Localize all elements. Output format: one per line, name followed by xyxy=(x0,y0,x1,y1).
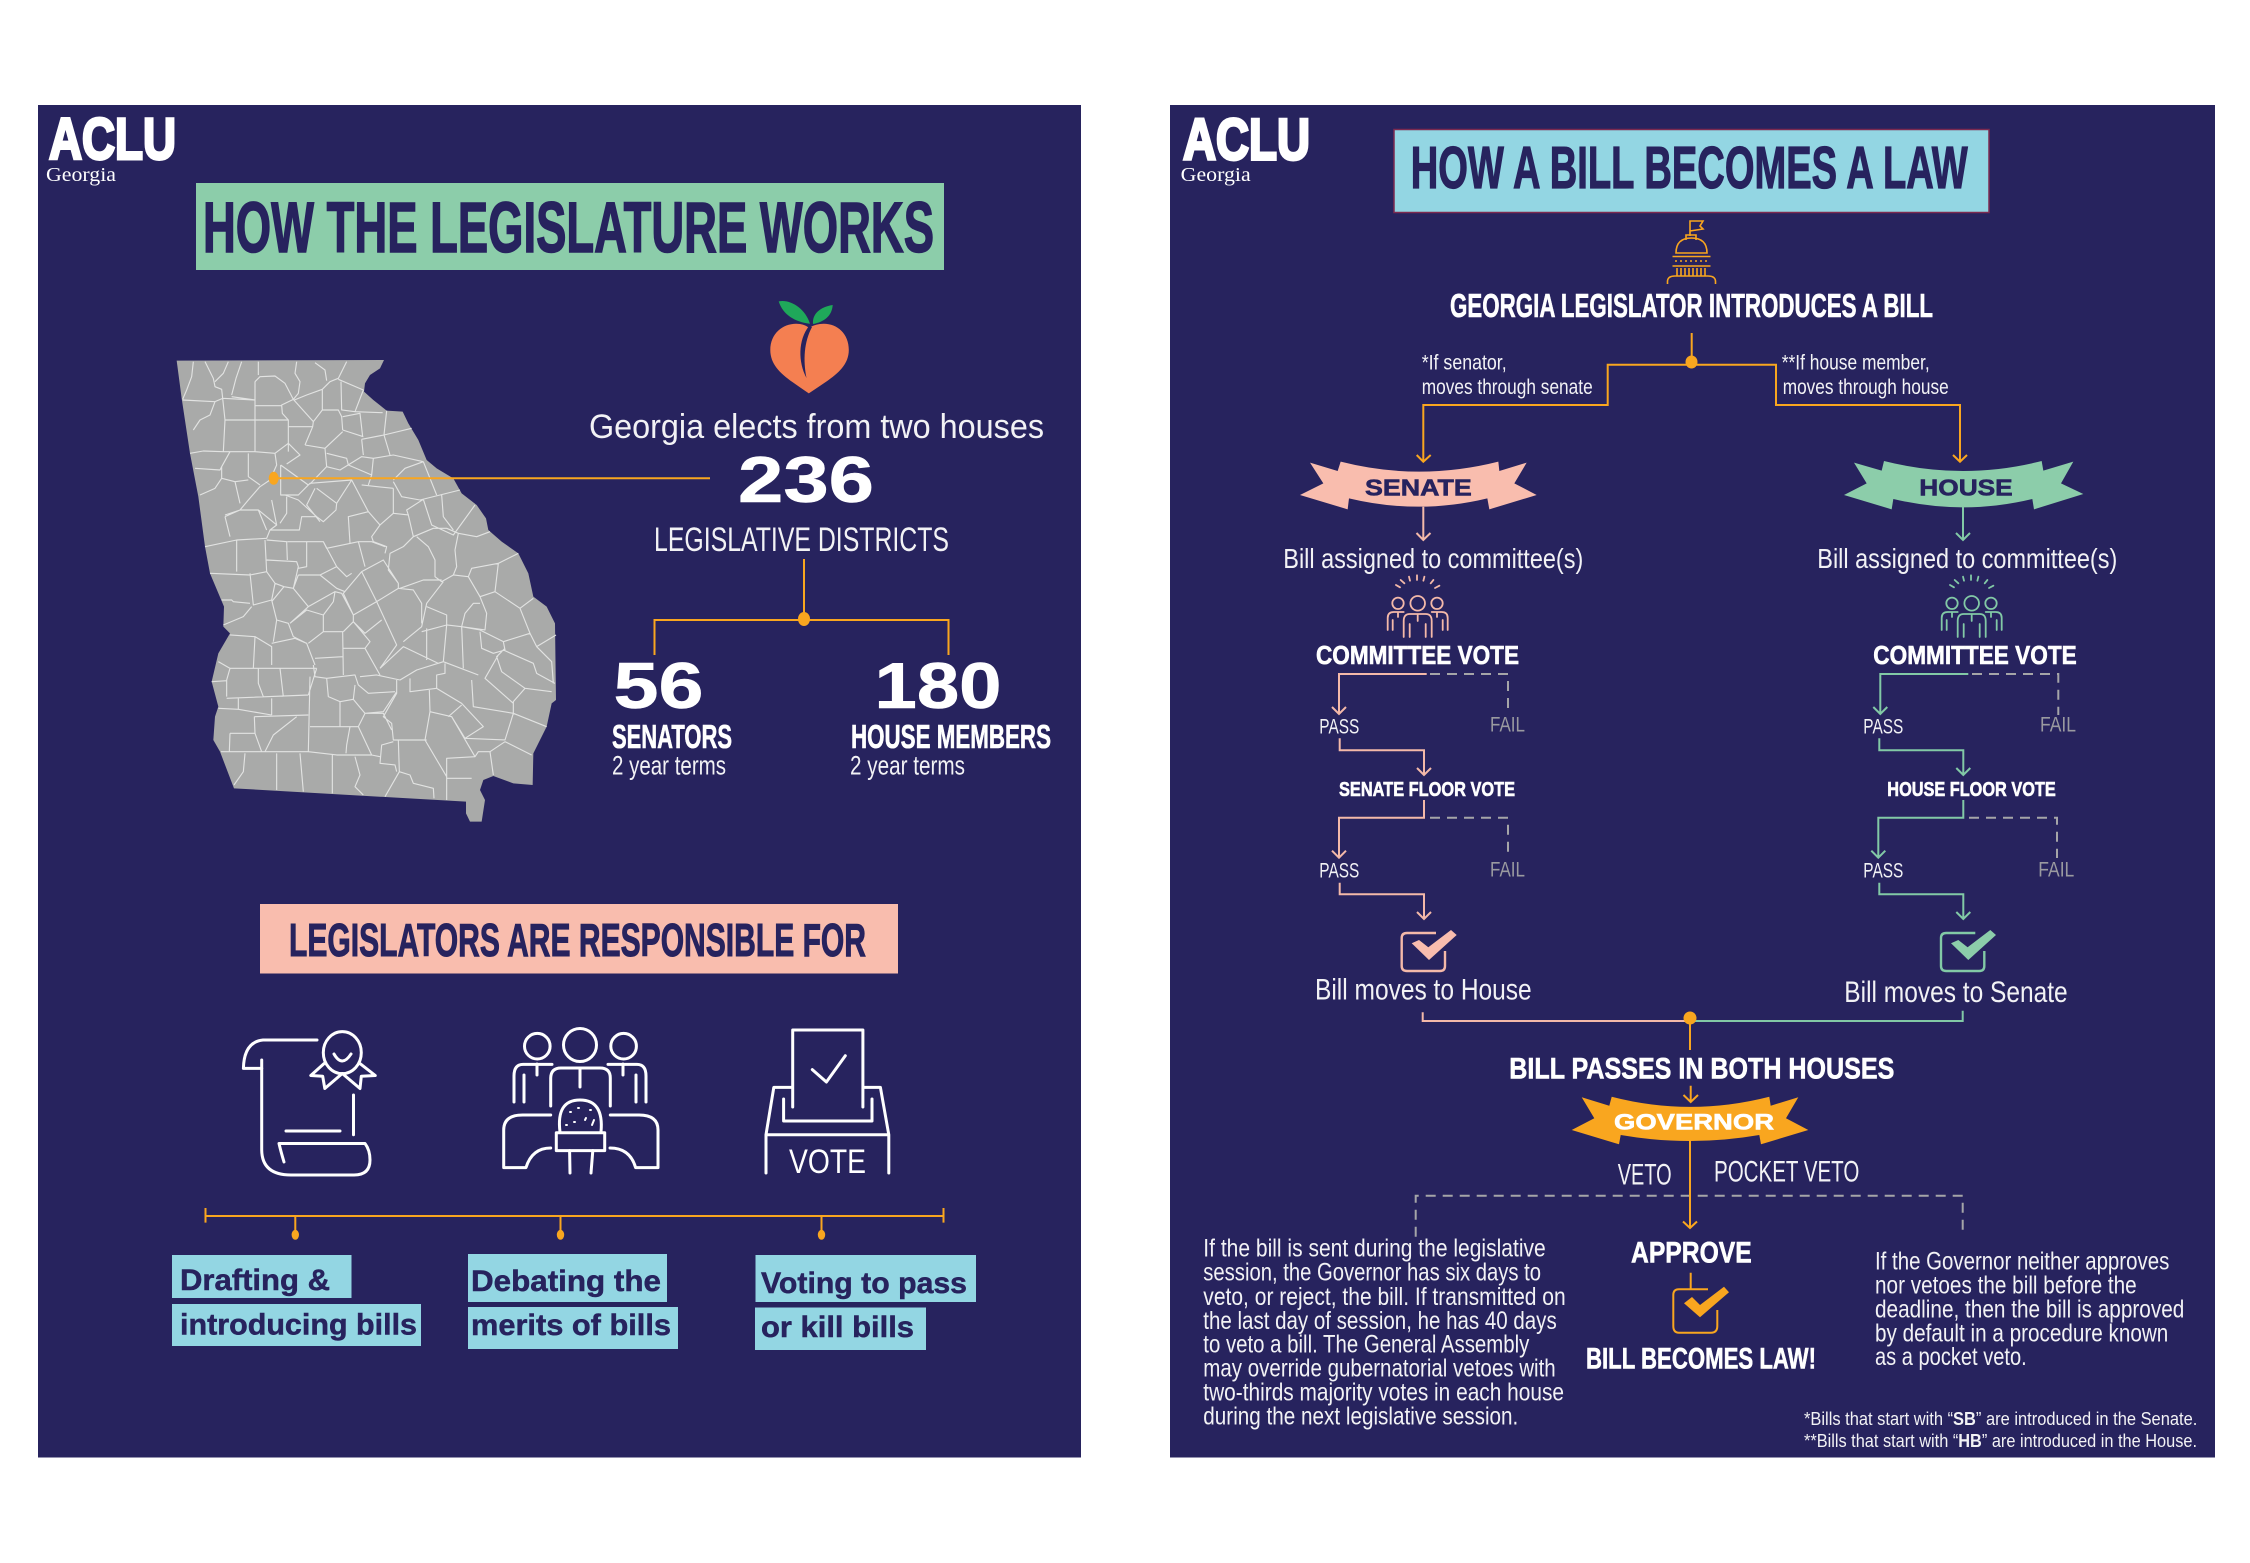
stat: 56 senators xyxy=(612,649,732,780)
icon: senate checkbox xyxy=(1402,930,1457,971)
text block: veto explanation xyxy=(1203,1235,1566,1430)
logo: ACLU Georgia: ACLU xyxy=(1183,108,1310,172)
stat: 180 house members xyxy=(850,649,1051,780)
text: bill moves to senate: Bill moves to Senate xyxy=(1844,976,2068,1009)
icon: debating legislators xyxy=(504,1028,658,1173)
logo: ACLU Georgia xyxy=(1181,108,1310,186)
title: how the legislature works xyxy=(196,183,944,270)
banner: senate: SENATE xyxy=(1365,475,1472,501)
flow: senate floor pass and fail: FAIL xyxy=(1490,859,1525,882)
flow: committee pass and fail: PASS xyxy=(1319,715,1359,738)
text block: pocket veto explanation: as a pocket veto. xyxy=(1875,1343,2027,1371)
icon: scroll with seal xyxy=(243,1032,375,1175)
text: committee vote: COMMITTEE VOTE xyxy=(1873,642,2077,670)
text block: veto explanation: may override gubernatorial vetoes with xyxy=(1203,1355,1556,1383)
flow: committee pass and fail xyxy=(1863,674,2076,775)
panel: how the legislature works xyxy=(38,105,1081,1458)
label: drafting and introducing bills xyxy=(172,1255,421,1346)
connector: split to senate and house xyxy=(1417,333,1967,462)
text: Georgia elects from two houses: Georgia elects from two houses xyxy=(589,408,1044,446)
banner: house xyxy=(1844,461,2083,509)
flow: senate floor pass and fail xyxy=(1319,800,1525,919)
arrow: senate to committee xyxy=(1416,507,1430,540)
panel: how a bill becomes a law xyxy=(1170,105,2215,1458)
text: bill becomes law: BILL BECOMES LAW! xyxy=(1586,1342,1816,1375)
flow: house floor pass and fail: FAIL xyxy=(2038,859,2074,882)
text block: pocket veto explanation: deadline, then the bill is approved xyxy=(1875,1295,2184,1323)
text block: veto explanation: If the bill is sent during the legislative xyxy=(1203,1235,1546,1263)
icon: ballot box: VOTE xyxy=(789,1143,866,1181)
text: senate floor vote: SENATE FLOOR VOTE xyxy=(1339,779,1515,801)
label: voting to pass or kill bills xyxy=(755,1255,976,1350)
logo: ACLU Georgia xyxy=(46,107,176,186)
icon: peach xyxy=(770,301,849,393)
heading: bill passes in both houses: BILL PASSES IN BOTH HOUSES xyxy=(1509,1053,1894,1086)
text: committee vote: COMMITTEE VOTE xyxy=(1316,642,1519,670)
text: approve: APPROVE xyxy=(1631,1237,1752,1270)
stat: 180 house members: HOUSE MEMBERS xyxy=(851,718,1051,755)
stat: 236: 236 xyxy=(738,443,874,516)
text block: veto explanation: session, the Governor has six days to xyxy=(1203,1259,1541,1287)
stat: 56 senators: 56 xyxy=(614,649,704,722)
banner: house: HOUSE xyxy=(1919,475,2013,501)
text: house floor vote: HOUSE FLOOR VOTE xyxy=(1887,779,2056,801)
logo: ACLU Georgia: ACLU xyxy=(49,107,176,172)
flow: committee pass and fail: FAIL xyxy=(2040,714,2076,737)
icon: senate committee xyxy=(1388,575,1448,637)
text: bill assigned to committee: Bill assigned to committee(s) xyxy=(1817,543,2117,574)
flow: house floor pass and fail: PASS xyxy=(1863,860,1903,883)
banner: senate xyxy=(1300,462,1537,509)
title: how the legislature works: HOW THE LEGISLATURE WORKS xyxy=(203,189,934,268)
text block: pocket veto explanation: If the Governor neither approves xyxy=(1875,1247,2169,1275)
banner: governor xyxy=(1572,1097,1808,1144)
text block: pocket veto explanation: by default in a procedure known xyxy=(1875,1319,2168,1347)
label: debating the merits of bills xyxy=(468,1254,678,1349)
logo: ACLU Georgia: Georgia xyxy=(46,164,116,186)
stat: 56 senators: 2 year terms xyxy=(612,750,726,780)
connector: veto branches xyxy=(1416,1196,1963,1237)
label: voting to pass or kill bills: or kill bills xyxy=(761,1311,914,1344)
title: how a bill becomes a law xyxy=(1394,130,1989,212)
connector: districts split xyxy=(654,559,948,655)
text: bill moves to house: Bill moves to House xyxy=(1315,973,1532,1006)
footnotes: **Bills that start with “HB” are introduced in the House. xyxy=(1804,1431,2197,1451)
note: if house member xyxy=(1782,351,1949,399)
note: if senator xyxy=(1422,351,1593,399)
icon: approve checkbox xyxy=(1673,1273,1729,1333)
icon: house committee xyxy=(1942,575,2002,637)
map: Georgia legislative districts xyxy=(177,360,710,822)
note: if senator: *If senator, xyxy=(1422,351,1507,374)
flow: house floor pass and fail xyxy=(1863,800,2074,919)
label: drafting and introducing bills: Drafting & xyxy=(180,1264,330,1297)
text block: veto explanation: two-thirds majority votes in each house xyxy=(1203,1379,1564,1407)
note: if house member: **If house member, xyxy=(1782,351,1930,374)
text block: veto explanation: veto, or reject, the bill. If transmitted on xyxy=(1203,1283,1566,1311)
footnotes xyxy=(1804,1409,2197,1451)
label: drafting and introducing bills: introducing bills xyxy=(180,1308,417,1342)
heading: legislators are responsible for: LEGISLATORS ARE RESPONSIBLE FOR xyxy=(289,914,866,966)
banner: governor: GOVERNOR xyxy=(1614,1109,1774,1134)
note: if senator: moves through senate xyxy=(1422,376,1593,399)
text: legislative districts: LEGISLATIVE DISTRICTS xyxy=(654,521,949,559)
stat: 180 house members: 2 year terms xyxy=(850,750,965,780)
stat: 56 senators: SENATORS xyxy=(612,718,732,755)
text block: pocket veto explanation xyxy=(1875,1247,2184,1371)
flow: committee pass and fail: PASS xyxy=(1863,715,1903,738)
arrow: to governor xyxy=(1684,1086,1698,1102)
timeline xyxy=(206,1208,944,1240)
text block: veto explanation: to veto a bill. The General Assembly xyxy=(1203,1331,1530,1359)
icon: capitol xyxy=(1668,221,1716,284)
icon: house checkbox xyxy=(1941,930,1996,971)
flow: committee pass and fail: FAIL xyxy=(1490,714,1525,737)
note: if house member: moves through house xyxy=(1783,376,1949,399)
text block: veto explanation: the last day of session, he has 40 days xyxy=(1203,1307,1557,1335)
connector: both houses merge xyxy=(1423,1011,1963,1050)
icon: ballot box xyxy=(766,1030,889,1181)
arrow: approve xyxy=(1683,1141,1697,1228)
logo: ACLU Georgia: Georgia xyxy=(1181,164,1251,186)
flow: committee pass and fail xyxy=(1319,674,1525,775)
heading: legislators are responsible for xyxy=(260,904,898,974)
house column xyxy=(1817,461,2117,1009)
heading: Georgia legislator introduces a bill: GEORGIA LEGISLATOR INTRODUCES A BILL xyxy=(1450,288,1933,325)
stat: 180 house members: 180 xyxy=(874,649,1002,722)
label: debating the merits of bills: merits of bills xyxy=(471,1309,671,1342)
flow: senate floor pass and fail: PASS xyxy=(1319,860,1359,883)
text block: pocket veto explanation: nor vetoes the bill before the xyxy=(1875,1271,2137,1299)
senate column xyxy=(1283,462,1583,1006)
arrow: house to committee xyxy=(1956,507,1970,540)
footnotes: *Bills that start with “SB” are introduced in the Senate. xyxy=(1804,1409,2197,1429)
label: debating the merits of bills: Debating the xyxy=(471,1265,661,1298)
label: voting to pass or kill bills: Voting to pass xyxy=(761,1267,967,1300)
text block: veto explanation: during the next legislative session. xyxy=(1203,1402,1518,1430)
text: veto: VETO xyxy=(1618,1158,1672,1191)
text: pocket veto: POCKET VETO xyxy=(1714,1156,1859,1189)
text: bill assigned to committee: Bill assigned to committee(s) xyxy=(1283,543,1583,574)
